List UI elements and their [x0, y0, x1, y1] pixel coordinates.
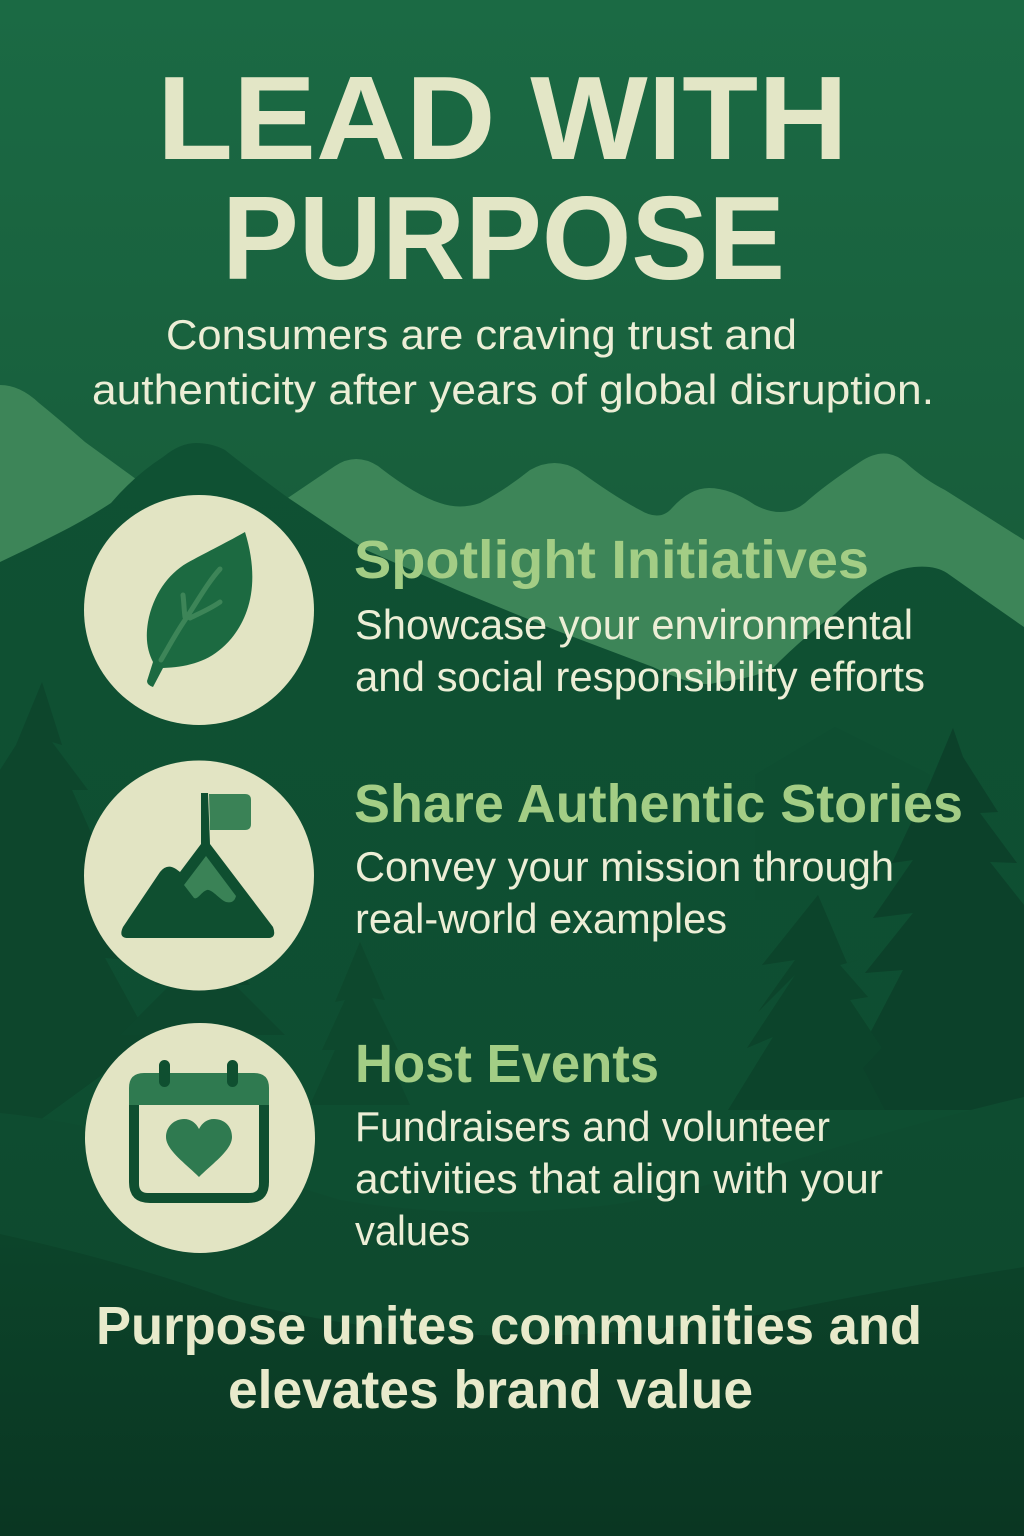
closing statement: Purpose unites communities and: [96, 1296, 922, 1356]
description: real-world examples: [355, 895, 727, 942]
foreground hills: [0, 1097, 1024, 1536]
title: [157, 52, 848, 305]
description: activities that align with your: [355, 1155, 883, 1202]
panel: host events: [85, 1023, 883, 1254]
mountain landscape: [0, 385, 1024, 1536]
trees: [0, 682, 1024, 1120]
icon: calendar with heart: [85, 1023, 315, 1253]
background: [0, 0, 1024, 600]
panel: share authentic stories: [84, 760, 963, 990]
heading: Spotlight Initiatives: [354, 530, 869, 590]
description: Showcase your environmental: [355, 601, 913, 648]
intro text: authenticity after years of global disruption.: [92, 366, 934, 413]
intro text: Consumers are craving trust and: [166, 311, 797, 358]
icon: mountain with flag: [84, 760, 314, 990]
icon: leaf: [84, 495, 314, 725]
heading: Share Authentic Stories: [354, 774, 963, 834]
heading: Host Events: [355, 1034, 659, 1094]
description: values: [355, 1207, 470, 1254]
description: and social responsibility efforts: [355, 653, 925, 700]
panel: spotlight initiatives: [84, 495, 925, 725]
title: LEAD WITH: [157, 52, 848, 185]
description: [355, 843, 894, 942]
closing statement: [96, 1296, 922, 1420]
description: [355, 1103, 883, 1254]
description: Convey your mission through: [355, 843, 894, 890]
closing statement: elevates brand value: [228, 1360, 753, 1420]
description: [355, 601, 925, 700]
description: Fundraisers and volunteer: [355, 1103, 830, 1150]
title: PURPOSE: [222, 172, 785, 305]
intro text: [92, 311, 934, 413]
faint far peak: [755, 727, 930, 900]
